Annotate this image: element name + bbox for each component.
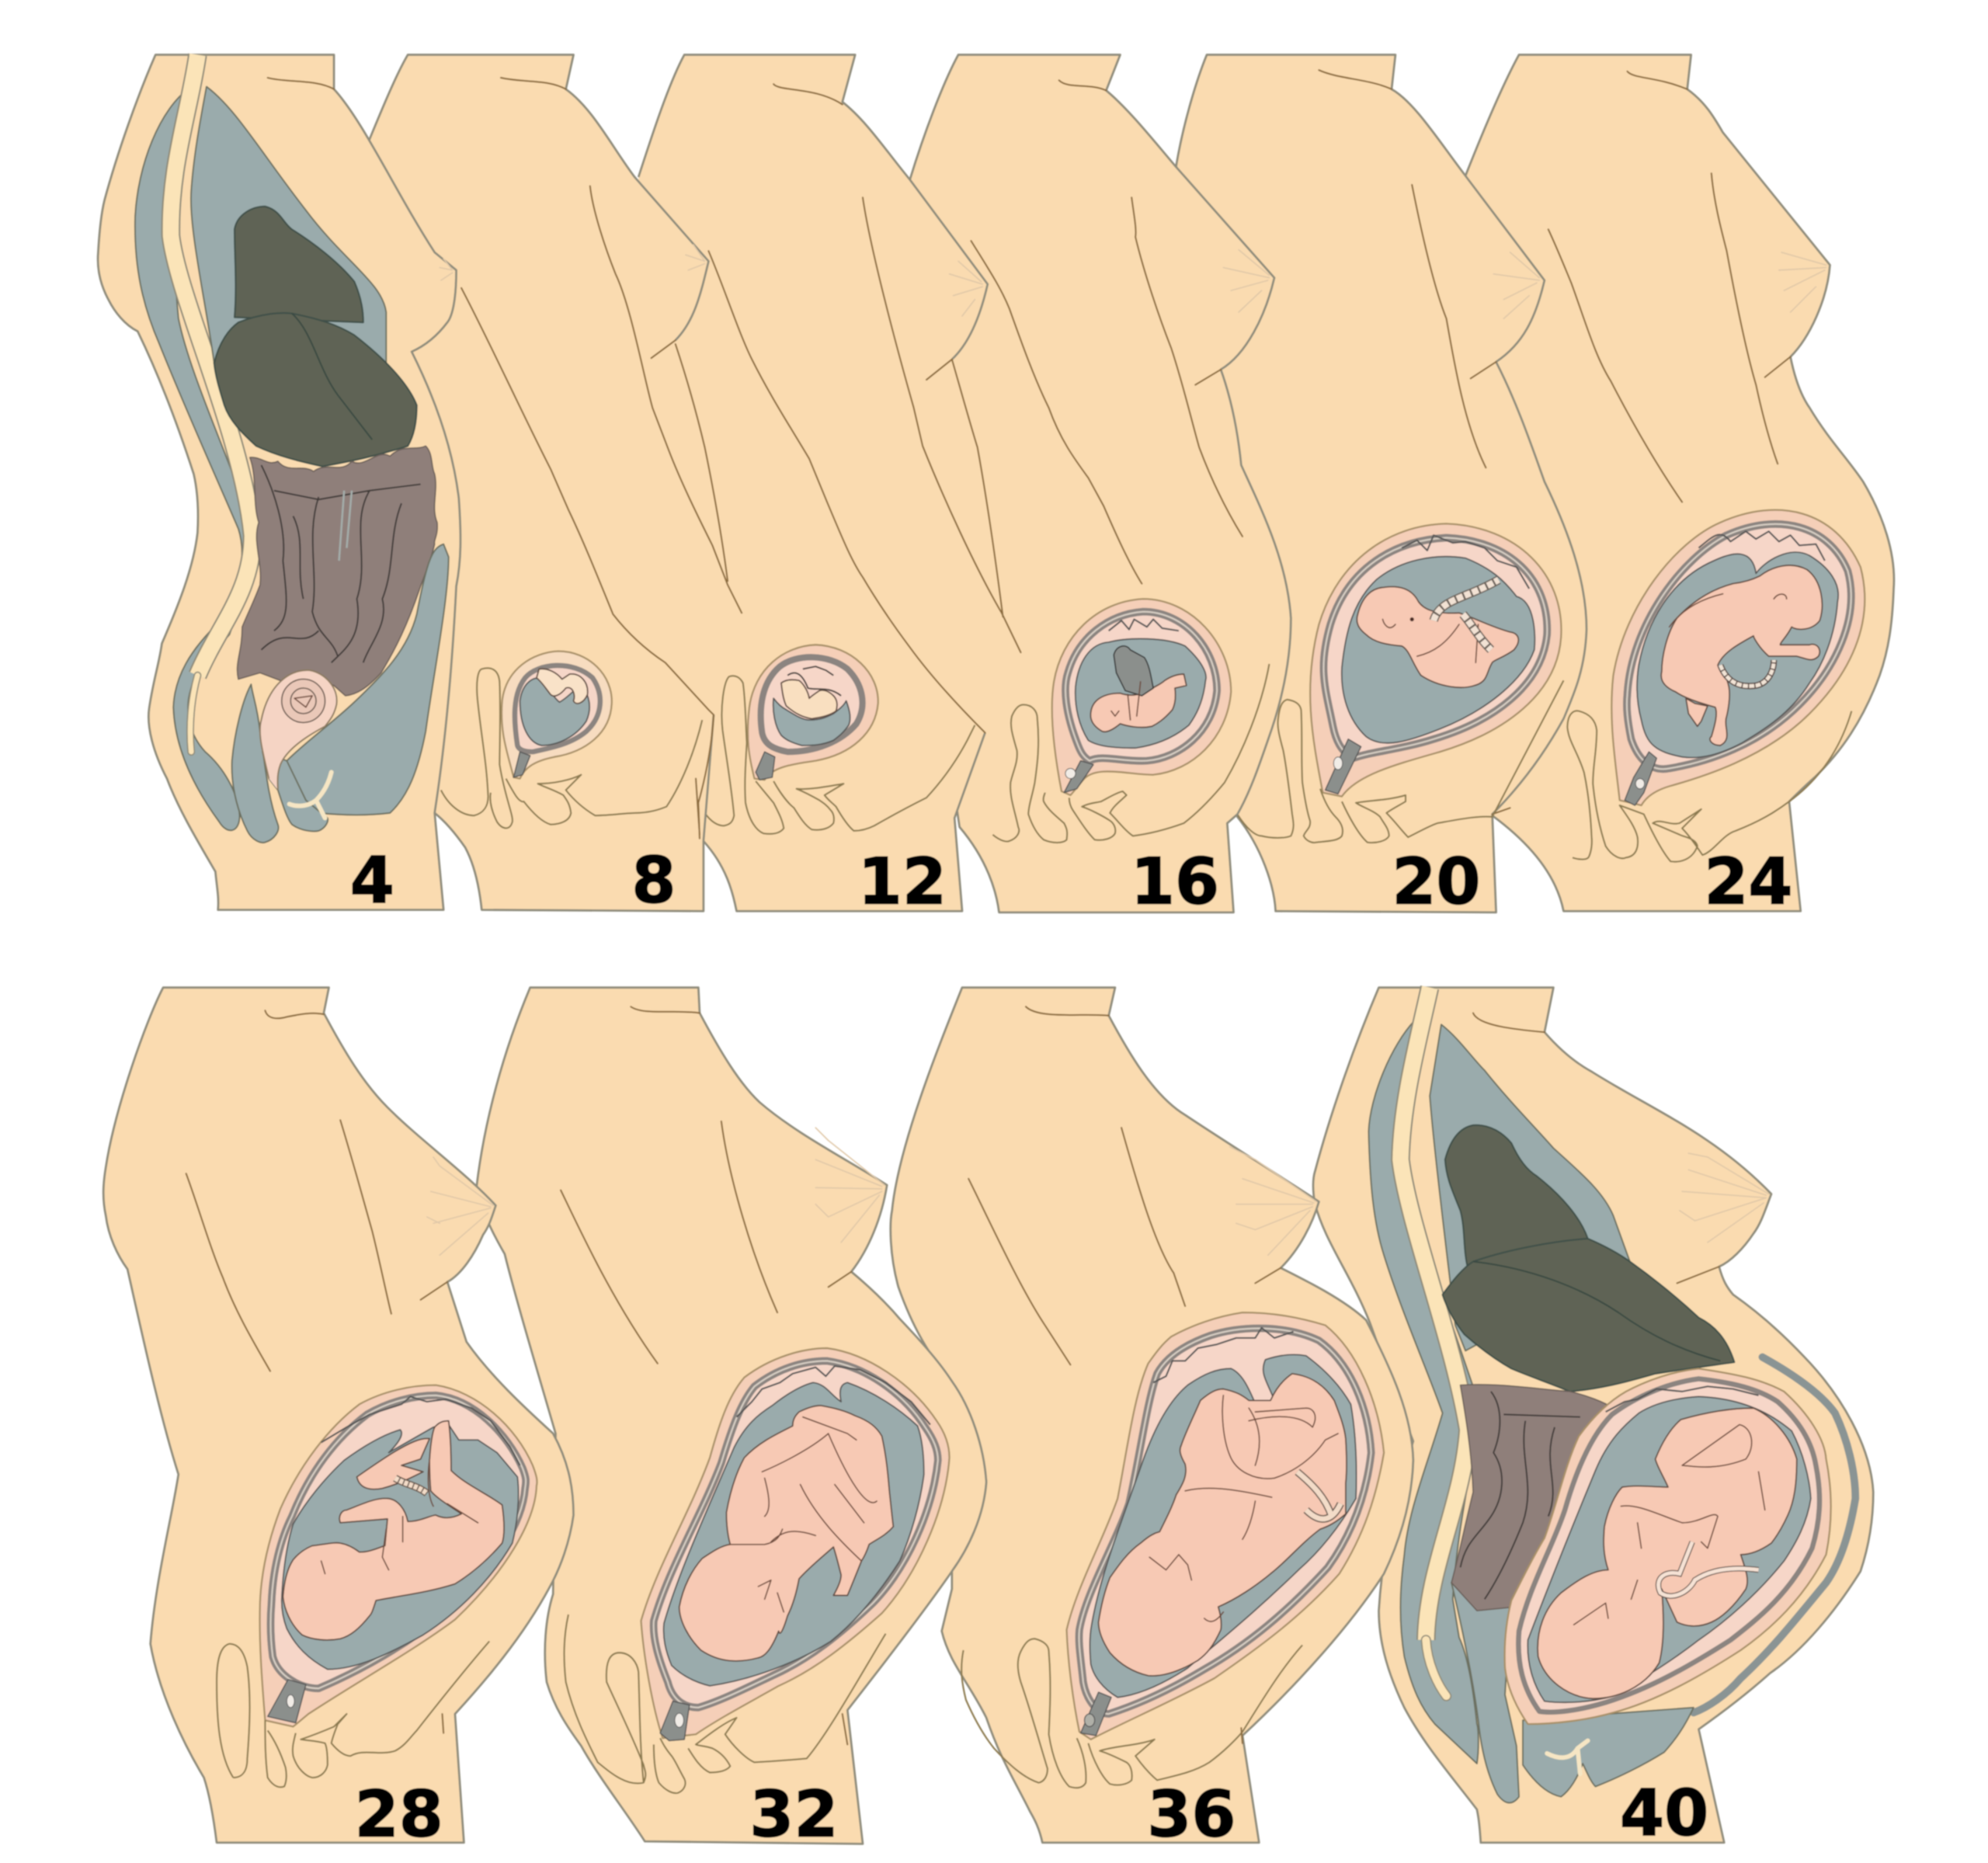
lower grey pelvic region [1523, 1708, 1694, 1797]
body outline week 12 [638, 55, 988, 911]
liver week 40 [1443, 1239, 1734, 1392]
cervix week 20 [1326, 739, 1361, 794]
fetus week 16 [1090, 674, 1187, 732]
body silhouette week 24 [1465, 55, 1894, 911]
breast veins week 24 [1779, 252, 1826, 312]
chin line week 4 [268, 78, 334, 89]
week 32 figure [477, 988, 986, 1852]
uterus week 20 [1310, 523, 1561, 797]
body silhouette week 16 [892, 55, 1291, 912]
body silhouette week 32 [477, 988, 986, 1844]
embryo week 12 [781, 680, 837, 718]
breast veins week 20 [1493, 252, 1539, 318]
weeks number 20: 20 [1392, 845, 1480, 919]
fetus week 40 [1538, 1408, 1797, 1698]
liver [214, 313, 417, 467]
fetus week 24 [1661, 565, 1822, 746]
pelvic organs week 12 [705, 676, 975, 834]
umbilical cord week 28 [395, 1478, 427, 1493]
fetus week 20 [1357, 586, 1518, 687]
week 24 figure [1465, 55, 1894, 919]
pelvic organs week 32 [565, 1614, 886, 1793]
back cavity grey [135, 87, 255, 830]
pelvic organs week 24 [1567, 711, 1851, 862]
body silhouette week 36 [891, 988, 1413, 1843]
lower front organ grey [286, 544, 449, 815]
week 8 figure [367, 55, 742, 918]
umbilical cord week 40 [1659, 1541, 1759, 1596]
uterus week 4 [260, 670, 337, 790]
cervix week 12 [756, 752, 775, 780]
body fill week 8 [367, 55, 729, 911]
weeks number 40: 40 [1620, 1777, 1708, 1851]
pelvic organs week 8 [441, 668, 702, 828]
cervix week 24 [1625, 752, 1656, 805]
body silhouette week 4 [98, 55, 461, 910]
body fill week 12 [638, 55, 1003, 911]
back cavity grey week 40 [1368, 1020, 1479, 1764]
breast veins week 16 [1223, 250, 1269, 312]
bladder cream week 40 [1547, 1740, 1588, 1774]
rectum and vagina grey [232, 684, 279, 843]
week 12 figure [638, 55, 1020, 919]
pelvic organs week 20 [1237, 680, 1563, 843]
weeks number 12: 12 [858, 845, 947, 919]
uterus week 28 [260, 1385, 537, 1726]
body lines week 8 [461, 78, 742, 715]
week 20 figure [1176, 55, 1587, 919]
embryo week 8 [537, 669, 588, 704]
intestines [238, 446, 437, 696]
body lines week 28 [186, 1010, 447, 1371]
stomach [235, 207, 363, 322]
cervix week 8 [513, 752, 530, 777]
stomach week 40 [1445, 1125, 1588, 1269]
breast veins week 32 [815, 1128, 885, 1243]
pelvic organs week 16 [992, 664, 1269, 843]
chin line week 40 [1473, 1013, 1545, 1032]
body lines week 36 [968, 1006, 1281, 1364]
fetus week 32 [679, 1406, 893, 1661]
body lines week 24 [1548, 71, 1791, 502]
uterus week 32 [641, 1348, 950, 1740]
week 28 figure [103, 988, 574, 1852]
cervix week 28 [268, 1680, 306, 1723]
uterus week 16 [1052, 599, 1231, 795]
weeks number 28: 28 [355, 1778, 443, 1852]
umbilical cord week 36 [1298, 1472, 1340, 1519]
breast veins week 28 [427, 1157, 493, 1255]
uterus week 36 [1067, 1312, 1384, 1740]
uterus week 24 [1611, 510, 1865, 805]
body outline week 8 [367, 55, 714, 911]
week 16 figure [892, 55, 1291, 919]
bladder cream [290, 772, 332, 818]
cervix week 36 [1081, 1692, 1111, 1736]
weeks number 8: 8 [631, 844, 676, 918]
week 36 figure [891, 988, 1413, 1852]
weeks number 32: 32 [749, 1778, 838, 1852]
body lines week 12 [708, 84, 1020, 733]
uterus week 12 [748, 645, 878, 780]
cervix week 16 [1064, 761, 1093, 793]
umbilical cord week 24 [1720, 660, 1774, 686]
weeks number 16: 16 [1131, 845, 1219, 919]
intestines week 40 [1451, 1385, 1613, 1611]
breast veins week 4 [440, 259, 453, 280]
fetus week 28 [283, 1421, 504, 1640]
body lines week 20 [1319, 70, 1510, 815]
breast veins week 12 [950, 261, 982, 316]
weeks number 36: 36 [1147, 1778, 1236, 1852]
front cavity grey [191, 87, 386, 408]
body silhouette week 20 [1176, 55, 1587, 912]
breast veins week 8 [686, 245, 705, 270]
pelvic organs week 28 [217, 1641, 489, 1787]
week 40 cross-section figure [1313, 988, 1873, 1851]
body lines week 16 [971, 80, 1242, 584]
front cavity grey week 40 [1430, 1024, 1630, 1350]
rectal grey week 40 [1451, 1583, 1519, 1803]
uterus week 8 [502, 652, 612, 779]
week 4 cross-section figure [98, 55, 461, 918]
spine column week 40 [1400, 988, 1468, 1640]
body silhouette week 28 [103, 988, 574, 1843]
fetus week 36 [1099, 1374, 1347, 1676]
uterus week 40 [1505, 1368, 1831, 1724]
spine column [171, 55, 252, 676]
weeks number 4: 4 [350, 844, 394, 918]
breast veins week 36 [1230, 1147, 1316, 1255]
umbilical cord week 20 [1434, 580, 1499, 650]
body silhouette week 40 [1313, 988, 1873, 1843]
pelvic organs week 36 [961, 1639, 1302, 1788]
outer abdominal grey band [1694, 1357, 1855, 1712]
breast veins week 40 [1680, 1153, 1769, 1243]
weeks number 24: 24 [1704, 845, 1792, 919]
cervix week 32 [660, 1701, 690, 1740]
body lines week 32 [561, 1006, 851, 1364]
